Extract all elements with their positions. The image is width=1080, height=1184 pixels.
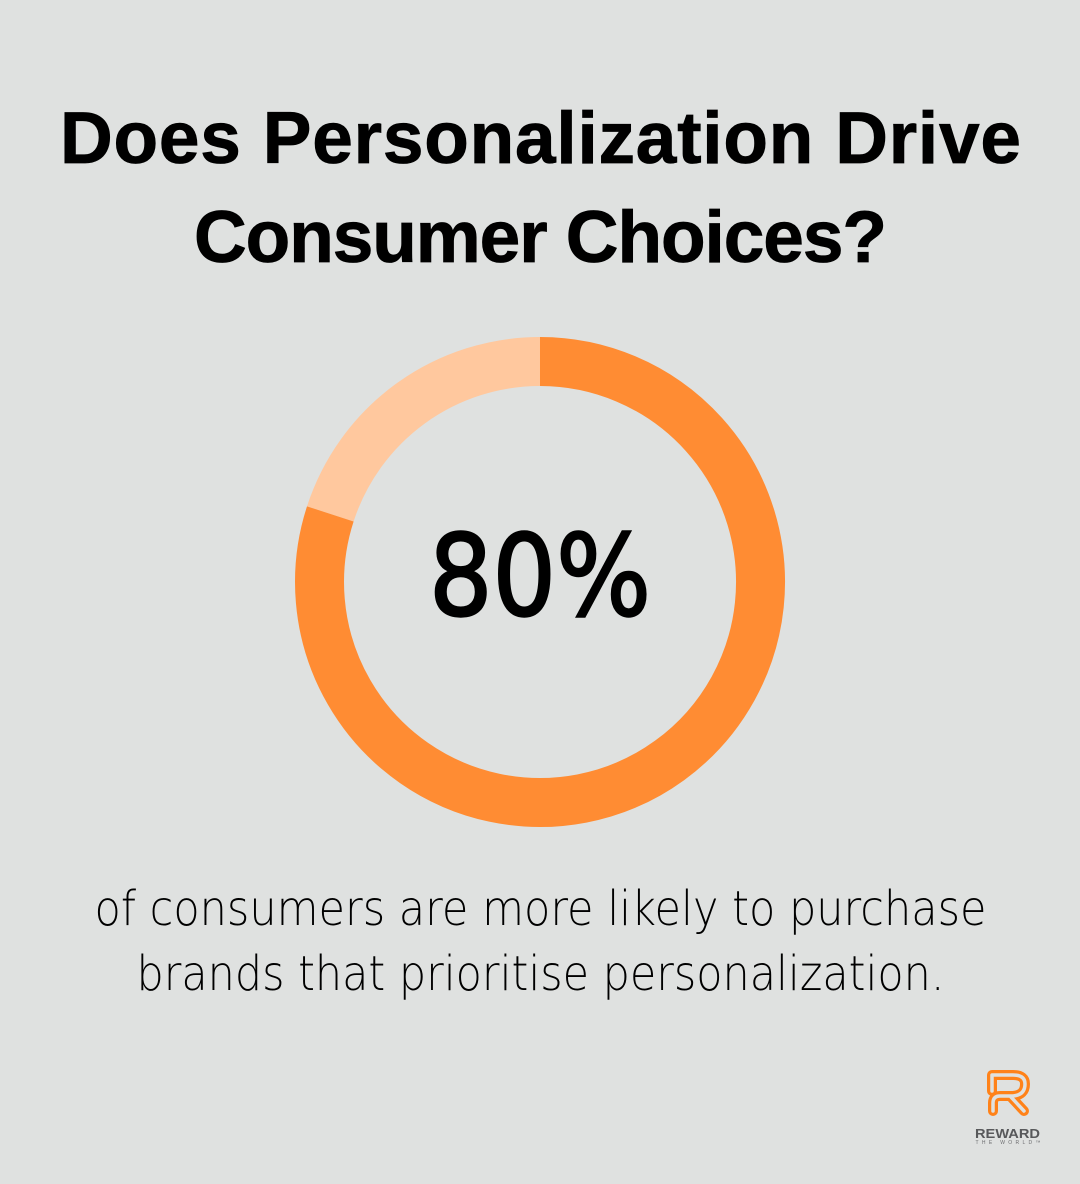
- donut segment: remaining 20%: [330, 362, 540, 514]
- logo: Reward the World: [975, 1075, 1040, 1146]
- title: Consumer Choices?: [194, 197, 887, 278]
- icon: R mark: [992, 1075, 1025, 1111]
- description text: [94, 881, 986, 1002]
- donut segment: 80%: [320, 362, 761, 802]
- title: Does Personalization Drive: [60, 98, 1021, 179]
- description text: of consumers are more likely to purchase: [94, 881, 986, 937]
- center value: 80%: [429, 512, 651, 642]
- logo wordmark: REWARD: [975, 1126, 1040, 1141]
- logo tagline: THE WORLD™: [976, 1140, 1040, 1146]
- title: [60, 98, 1021, 278]
- donut chart: 80%: [320, 362, 761, 802]
- description text: brands that prioritise personalization.: [136, 946, 944, 1002]
